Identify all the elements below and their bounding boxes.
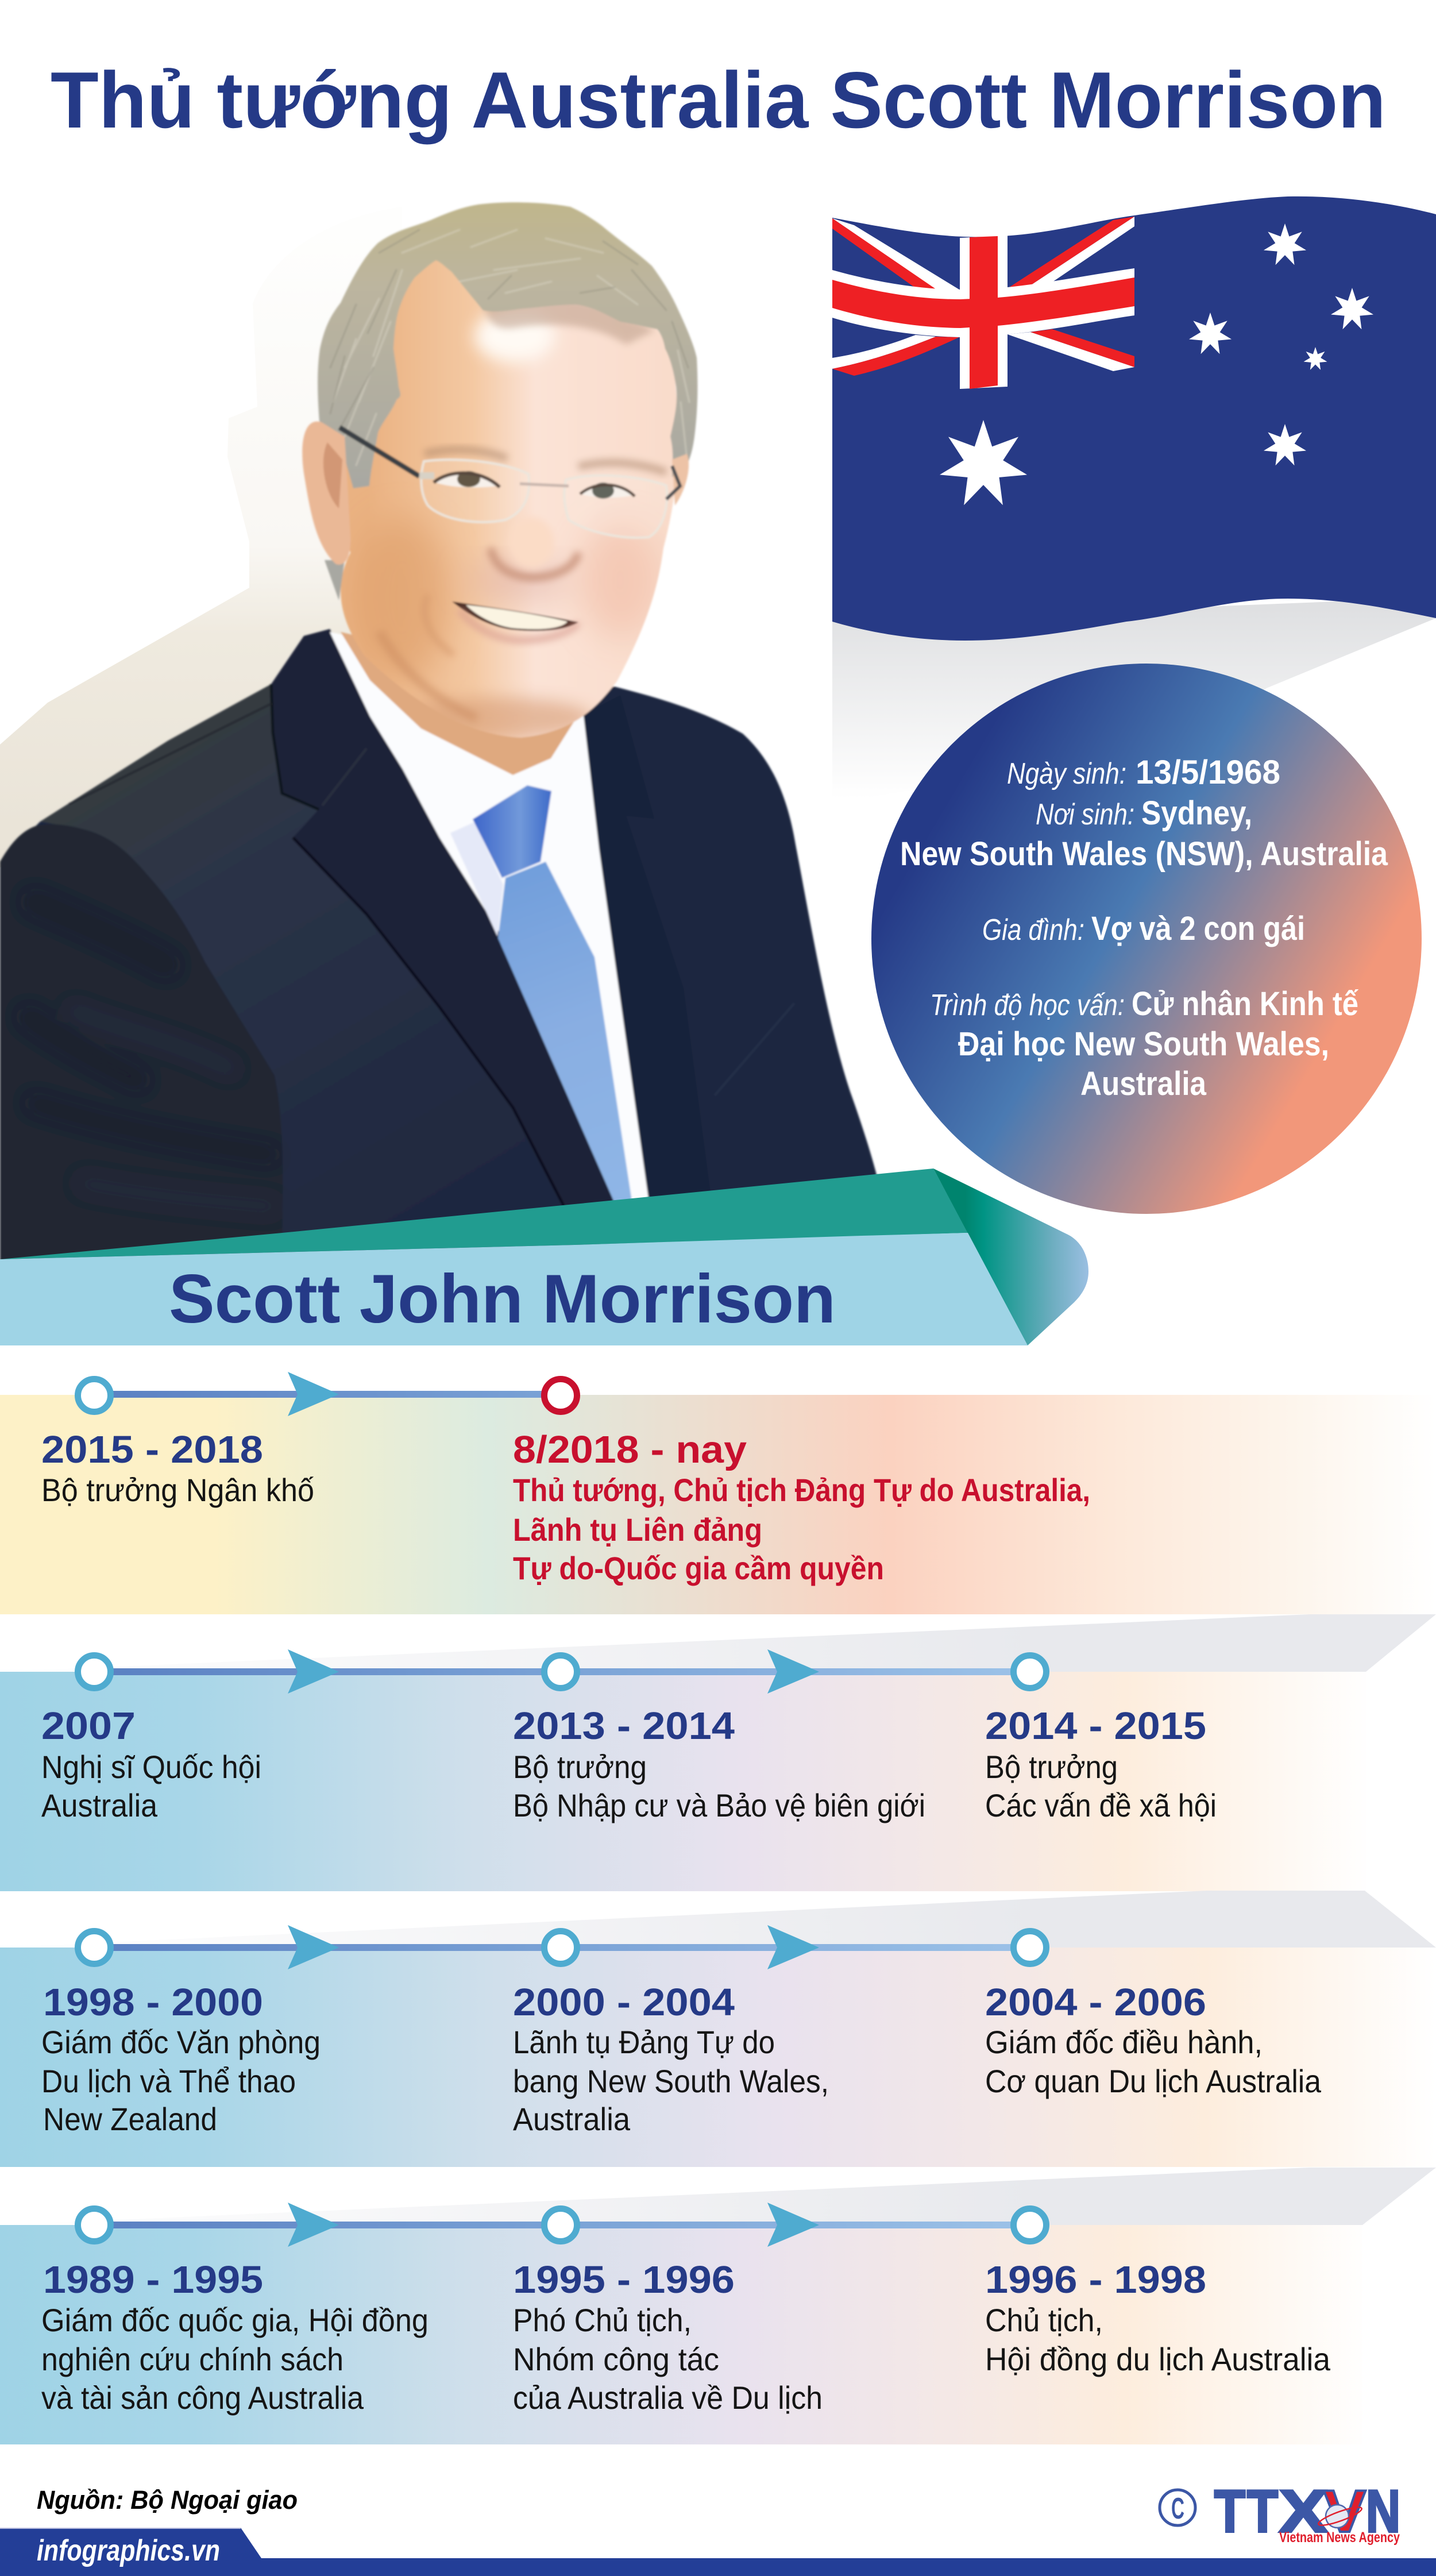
portrait: sleeve folds: [29, 902, 270, 1206]
logo: TTXVN: V: [1323, 2478, 1366, 2545]
icon: commonwealth star: [940, 420, 1027, 505]
milestone: 2013 - 2014: 2013 - 2014: [513, 1705, 735, 1748]
milestone: 1996 - 1998: Hội đồng du lịch Australia: [985, 2341, 1331, 2377]
timeline axis: [78, 1372, 577, 1416]
milestone: 8/2018 - nay: Tự do-Quốc gia cầm quyền: [513, 1550, 884, 1586]
text: date of birth: [1007, 754, 1280, 791]
milestone: 2007: 2007: [41, 1705, 136, 1748]
text: place of birth: [900, 795, 1388, 873]
text: place of birth: New South Wales (NSW), Australia: [900, 835, 1388, 873]
portrait: hairline shadow: [483, 295, 655, 345]
portrait: ear: [302, 422, 689, 565]
text: family: [982, 910, 1305, 947]
milestone: 2014 - 2015: [985, 1705, 1217, 1823]
milestone: 1995 - 1996: [513, 2258, 823, 2416]
icon: union jack: [832, 217, 1134, 389]
flag shadow: [832, 597, 1436, 804]
milestone: 1996 - 1998: Chủ tịch,: [985, 2302, 1103, 2338]
milestone: 8/2018 - nay: Lãnh tụ Liên đảng: [513, 1511, 762, 1548]
milestone: 2000 - 2004: Lãnh tụ Đảng Tự do: [513, 2024, 775, 2060]
portrait: Scott Morrison: [0, 202, 879, 1264]
text: date of birth: Ngày sinh:: [1007, 757, 1126, 790]
portrait: eyebrows: [424, 450, 666, 472]
milestone: 2014 - 2015: Các vấn đề xã hội: [985, 1787, 1217, 1823]
milestone: 1995 - 1996: của Australia về Du lịch: [513, 2380, 823, 2416]
logo: TTXVN: [1160, 2478, 1400, 2546]
milestone: 2004 - 2006: Cơ quan Du lịch Australia: [985, 2063, 1322, 2099]
timeline axis: [78, 1925, 1047, 1969]
milestone: 2015 - 2018: [41, 1428, 314, 1508]
portrait: shirt: [330, 632, 649, 1203]
text: education: Cử nhân Kinh tế: [1132, 985, 1359, 1023]
portrait: glasses: [339, 427, 680, 538]
portrait: hair: [318, 202, 697, 600]
milestone: 2004 - 2006: 2004 - 2006: [985, 1981, 1206, 2024]
website label: infographics.vn: [37, 2534, 220, 2567]
panel: timeline row 3: [0, 1891, 1436, 2167]
milestone: 2004 - 2006: Giám đốc điều hành,: [985, 2024, 1263, 2060]
milestone: 1998 - 2000: New Zealand: [43, 2101, 217, 2137]
portrait: face: [341, 247, 678, 739]
milestone: 1995 - 1996: Nhóm công tác: [513, 2341, 719, 2377]
milestone: 1998 - 2000: Du lịch và Thể thao: [41, 2063, 296, 2099]
footer bar: [0, 2528, 1436, 2576]
milestone: 2013 - 2014: Bộ Nhập cư và Bảo vệ biên giới: [513, 1787, 925, 1823]
portrait: shirt shadow: [450, 822, 503, 936]
milestone: 2013 - 2014: [513, 1705, 925, 1823]
milestone: 2007: Nghị sĩ Quốc hội: [41, 1749, 261, 1785]
panel: timeline row 2: [0, 1614, 1436, 1891]
milestone: 8/2018 - nay: 8/2018 - nay: [513, 1428, 747, 1471]
ribbon: name banner: [0, 1169, 1088, 1345]
logo: TTXVN: T: [1247, 2478, 1278, 2545]
logo: TTXVN: N: [1366, 2478, 1400, 2545]
milestone: 2000 - 2004: [513, 1981, 829, 2137]
icon: Australian flag: [832, 196, 1436, 641]
milestone: 8/2018 - nay: Thủ tướng, Chủ tịch Đảng Tự do Australia,: [513, 1472, 1090, 1508]
milestone: 1996 - 1998: [985, 2258, 1331, 2377]
portrait: nose: [491, 517, 578, 577]
milestone: 2007: [41, 1705, 261, 1823]
milestone: 1989 - 1995: Giám đốc quốc gia, Hội đồng: [41, 2302, 429, 2338]
icon: southern cross stars: [1189, 223, 1373, 465]
text: education: [930, 985, 1359, 1102]
text: family: Vợ và 2 con gái: [1091, 910, 1305, 947]
logo: TTXVN: X: [1279, 2478, 1327, 2545]
milestone: 2000 - 2004: bang New South Wales,: [513, 2063, 829, 2099]
text: date of birth: 13/5/1968: [1136, 754, 1280, 791]
milestone: 1998 - 2000: Giám đốc Văn phòng: [41, 2024, 321, 2060]
text: place of birth: Sydney,: [1141, 795, 1252, 832]
logo: TTXVN: Vietnam News Agency: [1279, 2529, 1400, 2546]
panel: biography circle: [871, 664, 1422, 1214]
milestone: 2013 - 2014: Bộ trưởng: [513, 1749, 647, 1785]
portrait silhouette shadow: [0, 207, 402, 867]
portrait: neck: [341, 632, 578, 775]
timeline axis: [78, 1649, 1047, 1694]
milestone: 2004 - 2006: [985, 1981, 1322, 2099]
milestone: 8/2018 - nay: [513, 1428, 1090, 1586]
milestone: 2007: Australia: [41, 1787, 158, 1823]
text: education: Đại học New South Wales,: [958, 1025, 1329, 1063]
text: family: Gia đình:: [982, 913, 1084, 947]
milestone: 2000 - 2004: 2000 - 2004: [513, 1981, 735, 2024]
panel: timeline row 1: [0, 1372, 1436, 1614]
portrait: suit jacket: [0, 629, 879, 1264]
logo: TTXVN: T: [1214, 2478, 1245, 2545]
milestone: 1995 - 1996: Phó Chủ tịch,: [513, 2302, 692, 2338]
milestone: 2014 - 2015: Bộ trưởng: [985, 1749, 1118, 1785]
milestone: 2015 - 2018: 2015 - 2018: [41, 1428, 263, 1471]
timeline axis: [78, 2203, 1047, 2247]
title: Thủ tướng Australia Scott Morrison: [51, 56, 1386, 145]
portrait: smile: [452, 601, 578, 641]
panel: timeline row 4: [0, 2168, 1436, 2444]
milestone: 1989 - 1995: [41, 2258, 429, 2416]
text: place of birth: Nơi sinh:: [1036, 798, 1134, 831]
icon: copyright mark: C: [1171, 2492, 1184, 2525]
text: education: Australia: [1080, 1065, 1207, 1102]
milestone: 1998 - 2000: [41, 1981, 321, 2137]
icon: globe: [1317, 2504, 1363, 2528]
source credit: Nguồn: Bộ Ngoại giao: [37, 2485, 298, 2515]
milestone: 2014 - 2015: 2014 - 2015: [985, 1705, 1206, 1748]
milestone: 1989 - 1995: nghiên cứu chính sách: [41, 2341, 343, 2377]
milestone: 1989 - 1995: và tài sản công Australia: [41, 2380, 364, 2416]
milestone: 2000 - 2004: Australia: [513, 2101, 631, 2137]
milestone: 1998 - 2000: 1998 - 2000: [43, 1981, 263, 2024]
milestone: 2015 - 2018: Bộ trưởng Ngân khố: [41, 1472, 314, 1508]
milestone: 1996 - 1998: 1996 - 1998: [985, 2258, 1206, 2301]
text: education: Trình độ học vấn:: [930, 989, 1125, 1022]
portrait: necktie: [473, 785, 632, 1203]
heading: full name: Scott John Morrison: [169, 1260, 836, 1337]
milestone: 1995 - 1996: 1995 - 1996: [513, 2258, 735, 2301]
portrait: eyes: [434, 471, 635, 499]
icon: copyright mark: [1160, 2490, 1195, 2525]
milestone: 1989 - 1995: 1989 - 1995: [43, 2258, 263, 2301]
